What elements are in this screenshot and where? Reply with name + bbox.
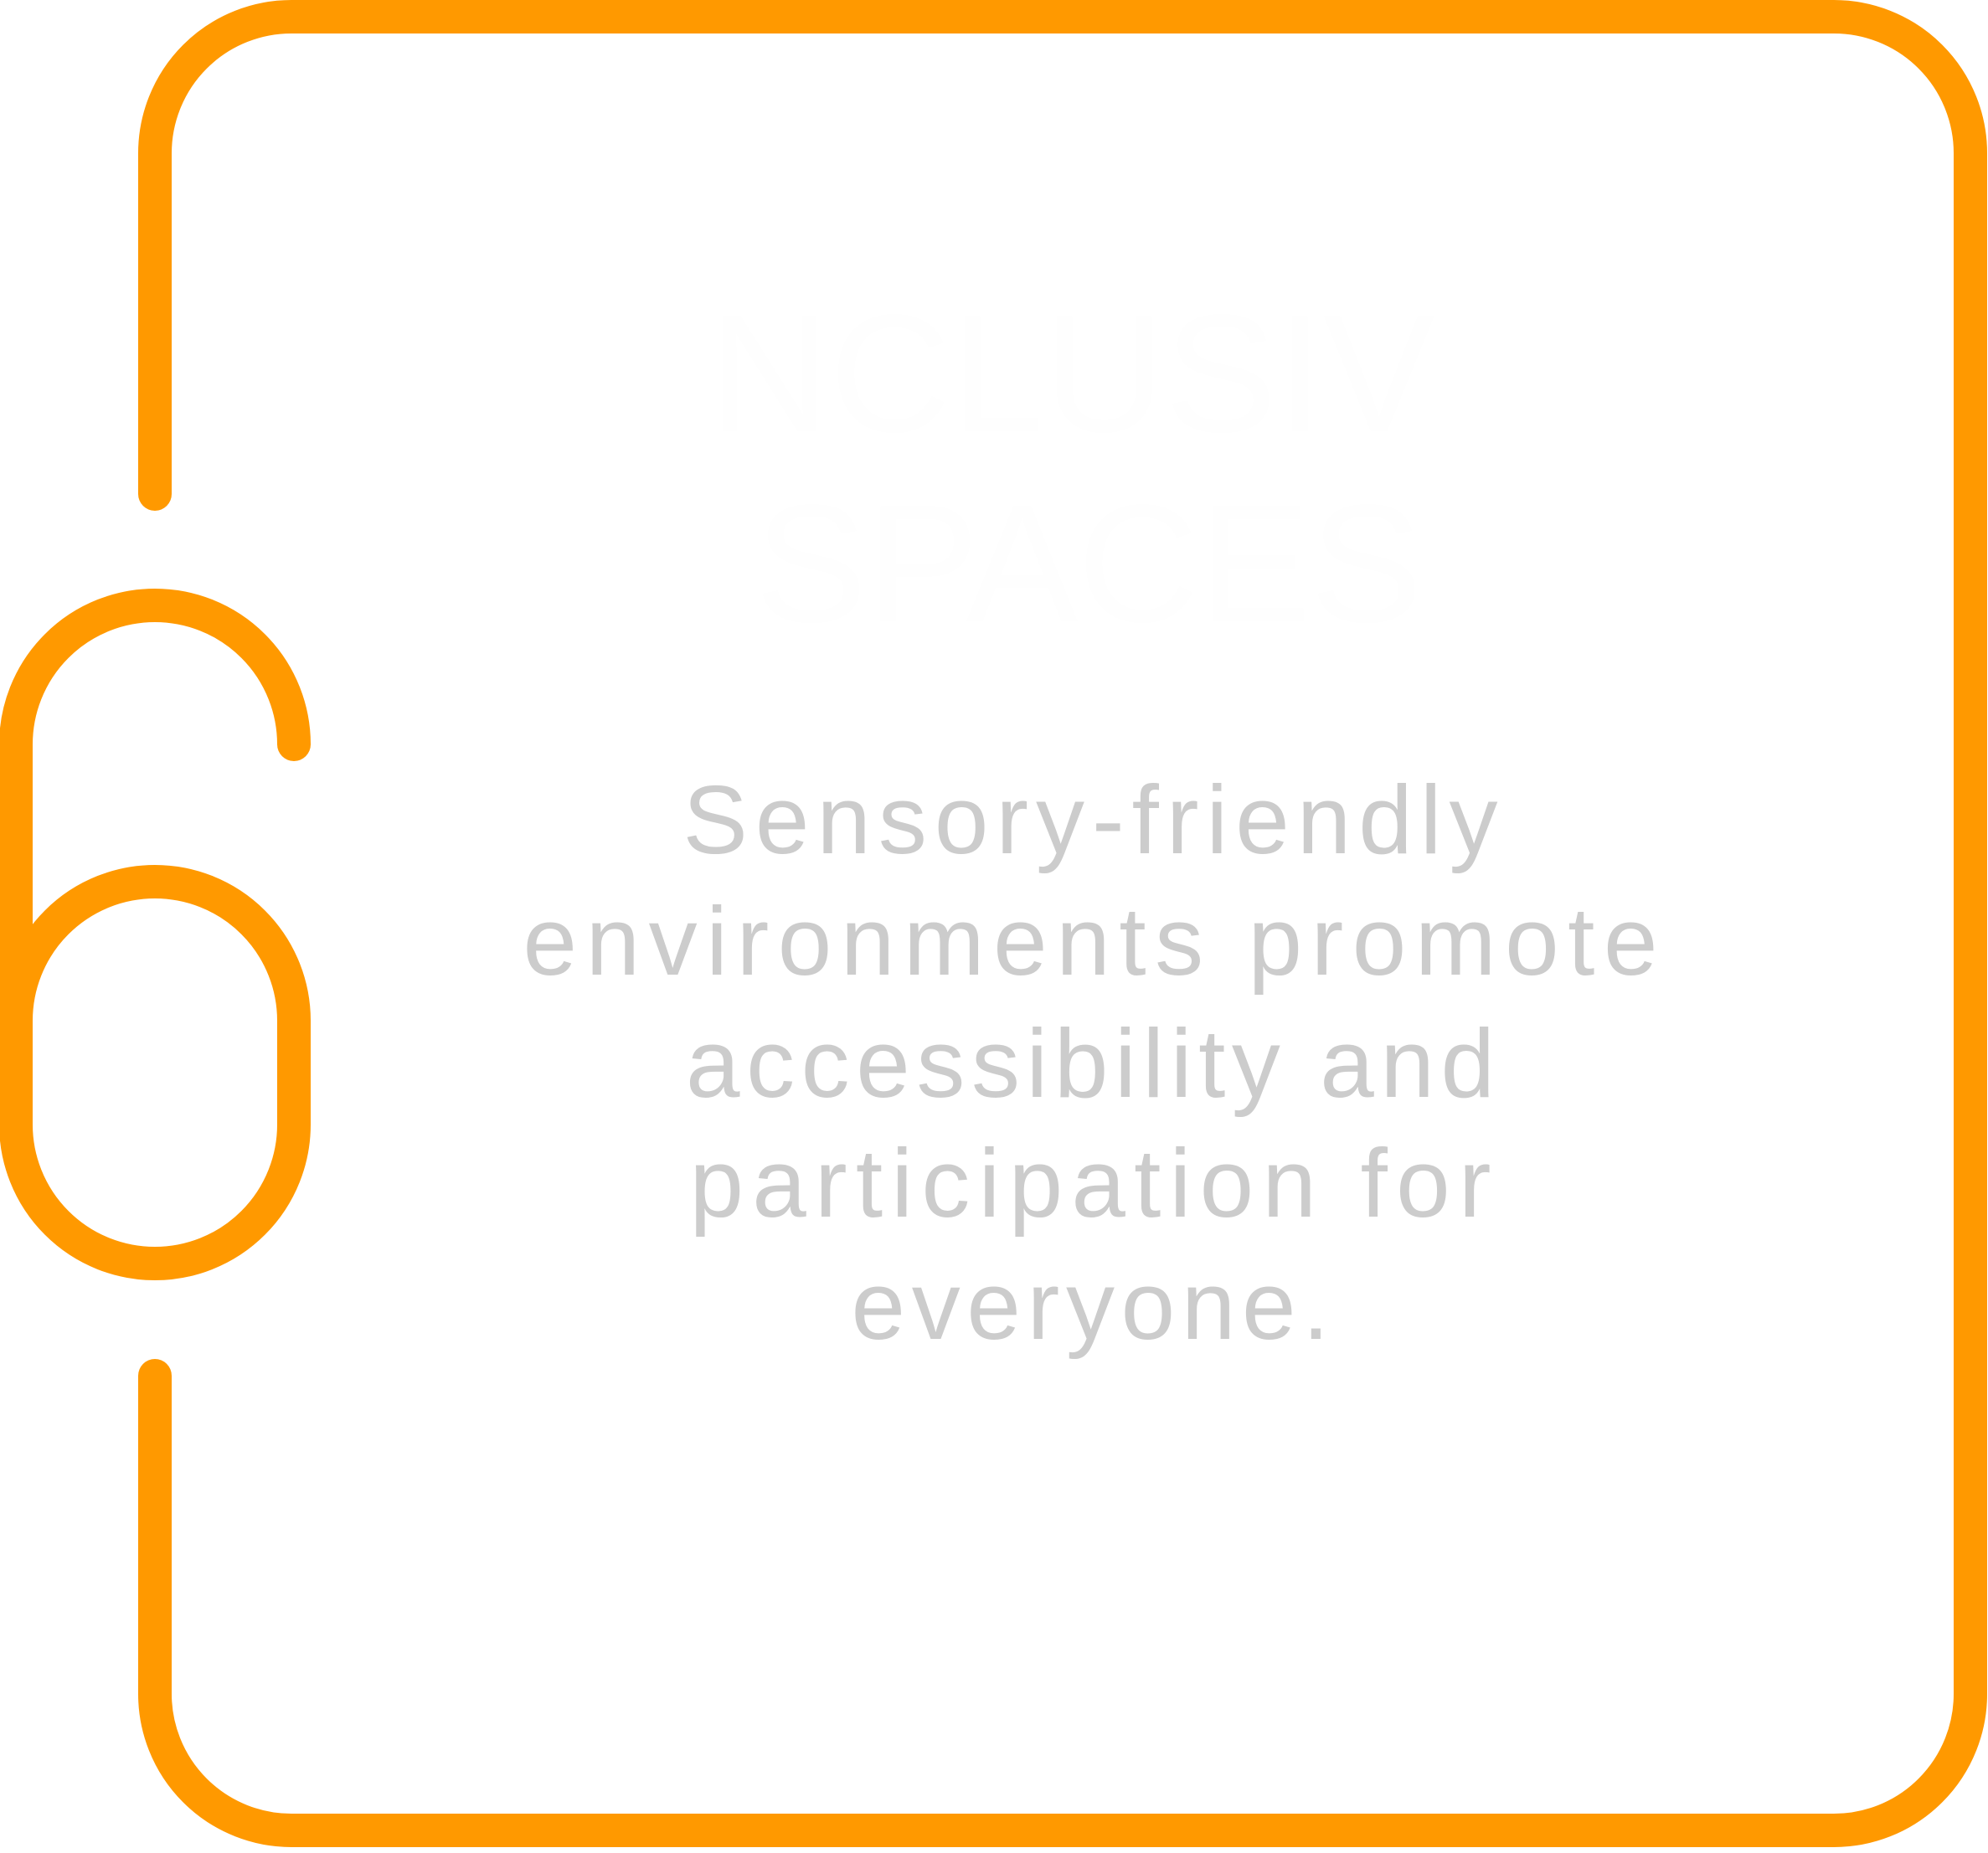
body text: accessibility and [686, 1009, 1495, 1118]
number six [16, 605, 294, 1264]
faint title: inclusive spaces [709, 281, 1434, 657]
body text: environments promote [523, 887, 1658, 996]
faint title: inclusive spaces: SPACES [755, 471, 1422, 657]
body text: Sensory-friendly [683, 765, 1497, 874]
body text: participation for [690, 1129, 1491, 1238]
body text [523, 765, 1658, 1360]
faint title: inclusive spaces: NCLUSIV [709, 281, 1434, 467]
body text: everyone. [851, 1251, 1330, 1360]
